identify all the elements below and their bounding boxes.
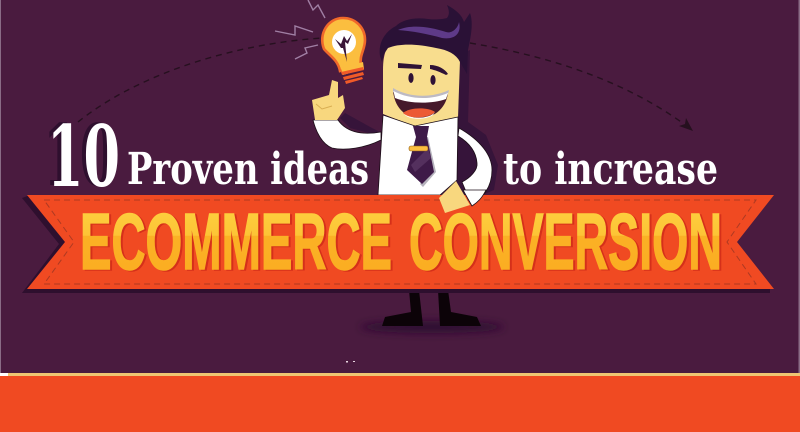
title: to increase: to increase <box>503 144 718 195</box>
bulb base stripes <box>341 62 364 84</box>
icon: sparks <box>275 0 325 59</box>
banner text shadow: ECOMMERCE <box>82 198 394 287</box>
front hand on banner <box>439 181 470 213</box>
banner shadow <box>22 195 770 293</box>
title shadow: 10 <box>43 106 116 205</box>
small specks <box>346 361 355 362</box>
panel: bottom orange band <box>0 373 800 432</box>
tie <box>407 126 436 187</box>
head <box>383 40 460 127</box>
bulb glow <box>332 30 356 54</box>
right arm <box>458 128 492 206</box>
floor shadow <box>360 321 504 333</box>
shirt <box>378 115 458 195</box>
character <box>312 5 492 206</box>
pointing hand <box>312 80 345 120</box>
dashed arc left <box>78 38 322 122</box>
title: proven ideas: Proven ideas <box>127 144 369 195</box>
bulb glass <box>322 18 365 71</box>
eyes <box>408 73 436 85</box>
hair <box>380 5 472 74</box>
dashed arc right with arrow <box>470 43 693 131</box>
legs and shoes <box>360 290 504 333</box>
forearm over banner <box>463 190 486 206</box>
banner ribbon <box>27 195 774 289</box>
banner <box>22 195 774 293</box>
left arm <box>313 120 381 149</box>
mouth <box>393 88 449 119</box>
bulb filament <box>335 34 352 62</box>
eyebrows <box>398 63 448 75</box>
banner stitching <box>44 200 756 284</box>
icon: light bulb <box>322 18 365 84</box>
heading: ecommerce conversion: ECOMMERCE <box>80 197 392 286</box>
title: 10: 10 <box>47 107 120 206</box>
character shadow <box>340 50 498 200</box>
